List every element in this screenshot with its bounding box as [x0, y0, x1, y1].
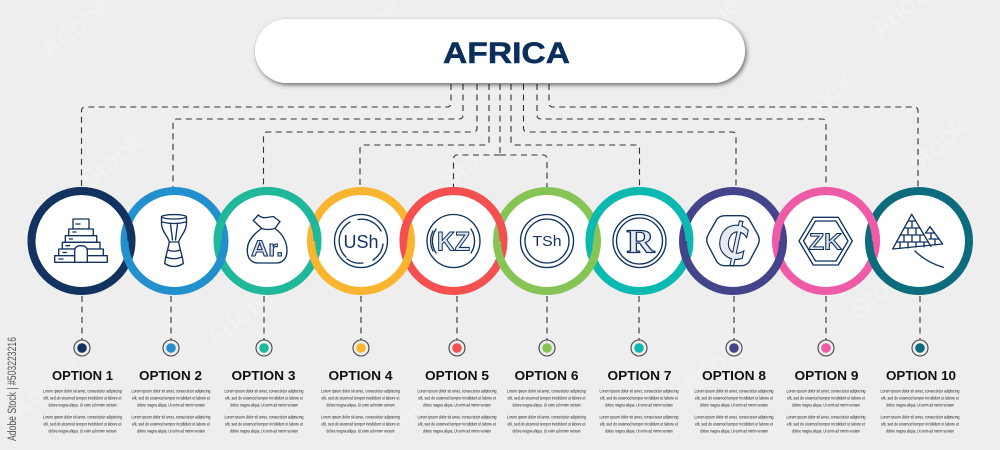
icon: money bag [247, 215, 287, 263]
option 4: Lorem ipsum dolor sit amet, consectetur adipiscing [321, 388, 400, 394]
option 6: dolore magna aliqua. Ut enim ad minim veniam [512, 428, 581, 434]
option 2: OPTION 2 [139, 368, 202, 383]
option 8: elit, sed do eiusmod tempor incididunt ut labore et [695, 422, 774, 426]
option 6: dolore magna aliqua. Ut enim ad minim veniam [512, 402, 581, 408]
option 9: Lorem ipsum dolor sit amet, consectetur adipiscing [786, 414, 866, 420]
option 7: Lorem ipsum dolor sit amet, consectetur adipiscing [600, 388, 679, 394]
option 10 [880, 340, 960, 434]
option 8: Lorem ipsum dolor sit amet, consectetur adipiscing [694, 414, 774, 420]
option 3: dolore magna aliqua. Ut enim ad minim veniam [230, 428, 298, 434]
text: Stock [435, 126, 509, 195]
connector lines from title to circles [82, 84, 918, 187]
option 4: elit, sed do eiusmod tempor incididunt ut labore et [322, 396, 400, 400]
option 4: dolore magna aliqua. Ut enim ad minim veniam [326, 402, 395, 408]
option 9: elit, sed do eiusmod tempor incididunt ut labore et [787, 396, 866, 400]
option 6: elit, sed do eiusmod tempor incididunt ut labore et [508, 396, 586, 400]
icon: KZ coin [427, 214, 480, 268]
connector lines from circles to dots [82, 296, 920, 340]
icon: ZK hexagon: ZK [809, 228, 842, 254]
option 8: dolore magna aliqua. Ut enim ad minim veniam [700, 402, 768, 408]
title text: AFRICA [443, 37, 570, 70]
option 3: dolore magna aliqua. Ut enim ad minim veniam [230, 402, 298, 408]
option 2: Lorem ipsum dolor sit amet, consectetur adipiscing [132, 414, 211, 420]
icon: ZK hexagon [799, 217, 852, 265]
option 9: elit, sed do eiusmod tempor incididunt ut labore et [787, 422, 866, 426]
option 10: dolore magna aliqua. Ut enim ad minim veniam [886, 402, 954, 408]
text: Adobe [200, 280, 281, 355]
option 6: Lorem ipsum dolor sit amet, consectetur adipiscing [507, 414, 586, 420]
option 10: elit, sed do eiusmod tempor incididunt ut labore et [881, 422, 960, 426]
option 9: dolore magna aliqua. Ut enim ad minim veniam [792, 428, 860, 434]
option 5: Lorem ipsum dolor sit amet, consectetur adipiscing [418, 388, 497, 394]
icon: rand coin: R [626, 224, 655, 260]
option 10: dolore magna aliqua. Ut enim ad minim veniam [886, 428, 954, 434]
icon: djembe drum [162, 215, 186, 266]
icon: cedi coin: ₵ [711, 209, 754, 273]
option 8: dolore magna aliqua. Ut enim ad minim veniam [700, 428, 768, 434]
text: Adobe [675, 325, 756, 400]
icon: USh coin [334, 214, 388, 268]
option 1: dolore magna aliqua. Ut enim ad minim veniam [48, 428, 117, 434]
option 1: Lorem ipsum dolor sit amet, consectetur adipiscing [43, 414, 122, 420]
option 7: elit, sed do eiusmod tempor incididunt ut labore et [600, 422, 679, 426]
icon: stepped pyramid [55, 219, 107, 262]
option 4: Lorem ipsum dolor sit amet, consectetur adipiscing [321, 414, 400, 420]
option 2 [132, 340, 211, 434]
option 9: dolore magna aliqua. Ut enim ad minim veniam [792, 402, 860, 408]
title pill [255, 19, 745, 83]
option 6: OPTION 6 [514, 368, 578, 383]
option 10: OPTION 10 [886, 368, 956, 383]
option 3: elit, sed do eiusmod tempor incididunt ut labore et [225, 396, 304, 400]
option 3: OPTION 3 [232, 368, 296, 383]
option 3: elit, sed do eiusmod tempor incididunt ut labore et [225, 422, 304, 426]
option 2: dolore magna aliqua. Ut enim ad minim veniam [137, 402, 205, 408]
option 5: dolore magna aliqua. Ut enim ad minim veniam [423, 402, 491, 408]
icon: USh coin: USh [344, 231, 378, 252]
text: Stock [75, 126, 149, 195]
icon: money bag: Ar. [251, 236, 283, 261]
option 2: elit, sed do eiusmod tempor incididunt ut labore et [132, 422, 211, 426]
text: Stock [785, 66, 859, 135]
text: Adobe [5, 350, 86, 425]
option 4: dolore magna aliqua. Ut enim ad minim veniam [326, 428, 395, 434]
option 3 [224, 340, 304, 434]
text: Stock [845, 256, 919, 325]
option 9: OPTION 9 [794, 368, 858, 383]
option 1: dolore magna aliqua. Ut enim ad minim veniam [48, 402, 117, 408]
option 4: elit, sed do eiusmod tempor incididunt ut labore et [322, 422, 400, 426]
option 8: OPTION 8 [702, 368, 766, 383]
option 7: Lorem ipsum dolor sit amet, consectetur adipiscing [600, 414, 679, 420]
option 6: elit, sed do eiusmod tempor incididunt ut labore et [508, 422, 586, 426]
option 6 [507, 340, 586, 434]
option 7: dolore magna aliqua. Ut enim ad minim veniam [605, 428, 673, 434]
option 10: elit, sed do eiusmod tempor incididunt ut labore et [881, 396, 960, 400]
option 4: OPTION 4 [328, 368, 393, 383]
option 4 [321, 340, 400, 434]
option 1 [43, 340, 122, 434]
icon: KZ coin: KZ [437, 226, 470, 256]
option 7: dolore magna aliqua. Ut enim ad minim veniam [605, 402, 673, 408]
option 1: elit, sed do eiusmod tempor incididunt ut labore et [44, 396, 122, 400]
side credit text: Adobe Stock | #503223216 [7, 337, 19, 441]
option 10: Lorem ipsum dolor sit amet, consectetur adipiscing [880, 388, 960, 394]
option 5: elit, sed do eiusmod tempor incididunt ut labore et [418, 422, 497, 426]
option 2: dolore magna aliqua. Ut enim ad minim veniam [137, 428, 205, 434]
interlaced circles [32, 191, 969, 291]
icon: TSh coin: TSh [532, 233, 562, 250]
option 5: Lorem ipsum dolor sit amet, consectetur adipiscing [418, 414, 497, 420]
option 7 [600, 340, 679, 434]
option 10: Lorem ipsum dolor sit amet, consectetur adipiscing [880, 414, 960, 420]
option 9: Lorem ipsum dolor sit amet, consectetur adipiscing [786, 388, 866, 394]
option 6: Lorem ipsum dolor sit amet, consectetur adipiscing [507, 388, 586, 394]
text: Stock [900, 111, 974, 180]
option 5: elit, sed do eiusmod tempor incididunt ut labore et [418, 396, 497, 400]
option 8: Lorem ipsum dolor sit amet, consectetur adipiscing [694, 388, 774, 394]
option 7: elit, sed do eiusmod tempor incididunt ut labore et [600, 396, 679, 400]
option 9 [786, 340, 866, 434]
option 2: Lorem ipsum dolor sit amet, consectetur adipiscing [132, 388, 211, 394]
icon: rand coin [613, 214, 666, 268]
option 7: OPTION 7 [608, 368, 672, 383]
option 1: elit, sed do eiusmod tempor incididunt ut labore et [44, 422, 122, 426]
option 8 [694, 340, 774, 434]
option 5 [418, 340, 497, 434]
option 2: elit, sed do eiusmod tempor incididunt ut labore et [132, 396, 211, 400]
option 1: OPTION 1 [52, 368, 113, 383]
option 8: elit, sed do eiusmod tempor incididunt ut labore et [695, 396, 774, 400]
option 5: OPTION 5 [425, 368, 489, 383]
option 3: Lorem ipsum dolor sit amet, consectetur adipiscing [224, 414, 304, 420]
icon: pyramids [893, 214, 943, 267]
option 3: Lorem ipsum dolor sit amet, consectetur adipiscing [224, 388, 304, 394]
option 5: dolore magna aliqua. Ut enim ad minim veniam [423, 428, 491, 434]
option 1: Lorem ipsum dolor sit amet, consectetur adipiscing [43, 388, 122, 394]
icon: TSh coin [520, 214, 574, 268]
text: Stock [370, 381, 444, 450]
